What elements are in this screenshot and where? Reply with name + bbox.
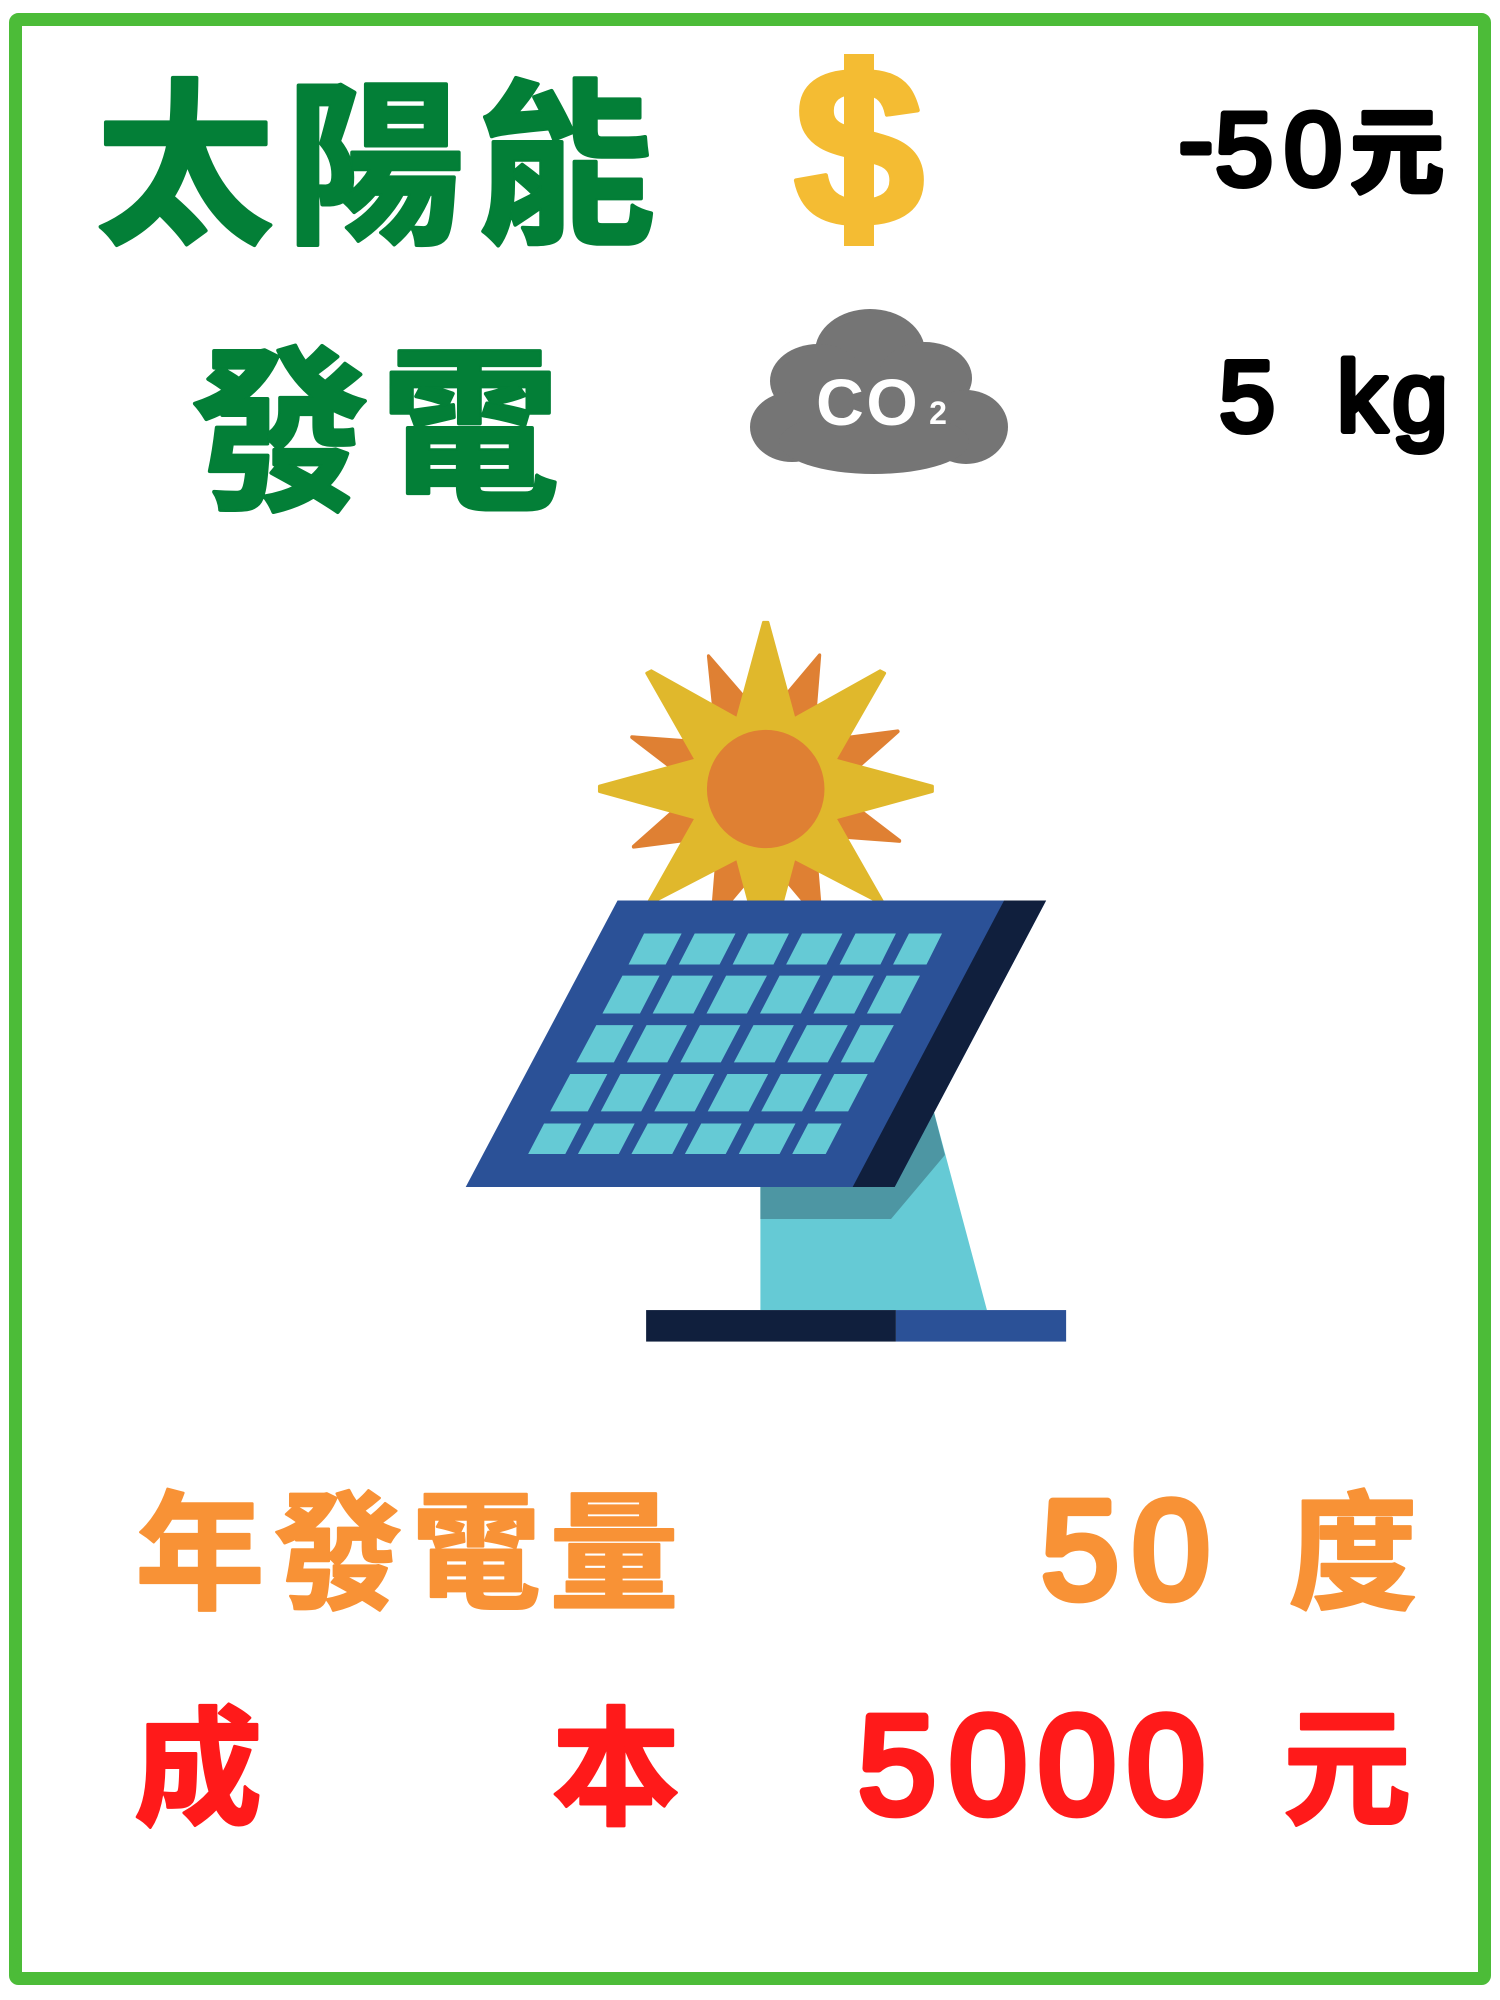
- emission value: 5 kg: [1219, 341, 1448, 453]
- saving value: -50 yuan: -: [1179, 83, 1213, 199]
- title: 能: [477, 68, 655, 267]
- annual generation value: 50 degrees: [1041, 1471, 1418, 1628]
- title: 發: [191, 335, 369, 534]
- icon: CO2 cloud: [750, 309, 1008, 474]
- saving value: -50 yuan: 5: [1215, 92, 1273, 208]
- icon: CO2 cloud: O: [866, 365, 918, 439]
- cost value: 5000 yuan: 0: [949, 1686, 1027, 1843]
- annual generation value: 50 degrees: 0: [1132, 1471, 1210, 1628]
- annual generation value: 50 degrees: 5: [1041, 1471, 1119, 1628]
- cost label: 本: [552, 1699, 680, 1842]
- title: 電: [381, 335, 559, 534]
- icon: dollar sign: $: [793, 20, 925, 275]
- solar panel stand: [646, 1104, 1066, 1342]
- emission value: 5 kg: 5: [1219, 341, 1275, 453]
- icon: sun: [599, 622, 933, 956]
- cost value: 5000 yuan: 0: [1127, 1686, 1205, 1843]
- cost value: 5000 yuan: 元: [1283, 1699, 1411, 1842]
- annual generation value: 50 degrees: 度: [1288, 1483, 1418, 1627]
- cost value: 5000 yuan: [858, 1686, 1411, 1843]
- annual generation label: [136, 1483, 678, 1627]
- cost label: 成: [134, 1699, 262, 1842]
- saving value: -50 yuan: [1179, 83, 1444, 208]
- emission value: 5 kg: k: [1337, 341, 1388, 453]
- annual generation label: 量: [550, 1483, 678, 1627]
- annual generation label: 電: [412, 1483, 540, 1627]
- saving value: -50 yuan: 0: [1284, 92, 1342, 208]
- saving value: -50 yuan: 元: [1350, 101, 1444, 205]
- emission value: 5 kg: g: [1392, 341, 1448, 453]
- solar panel: [466, 901, 1046, 1187]
- icon: CO2 cloud: 2: [929, 395, 947, 431]
- cost label: [134, 1699, 680, 1842]
- icon: CO2 cloud: C: [816, 365, 864, 439]
- title: 太: [96, 68, 274, 267]
- cost value: 5000 yuan: 5: [858, 1686, 936, 1843]
- cost value: 5000 yuan: 0: [1038, 1686, 1116, 1843]
- annual generation label: 年: [136, 1483, 264, 1627]
- annual generation label: 發: [274, 1483, 402, 1627]
- illustration: sun and solar panel: [466, 622, 1066, 1342]
- title: 陽: [286, 68, 464, 267]
- title: [96, 68, 655, 534]
